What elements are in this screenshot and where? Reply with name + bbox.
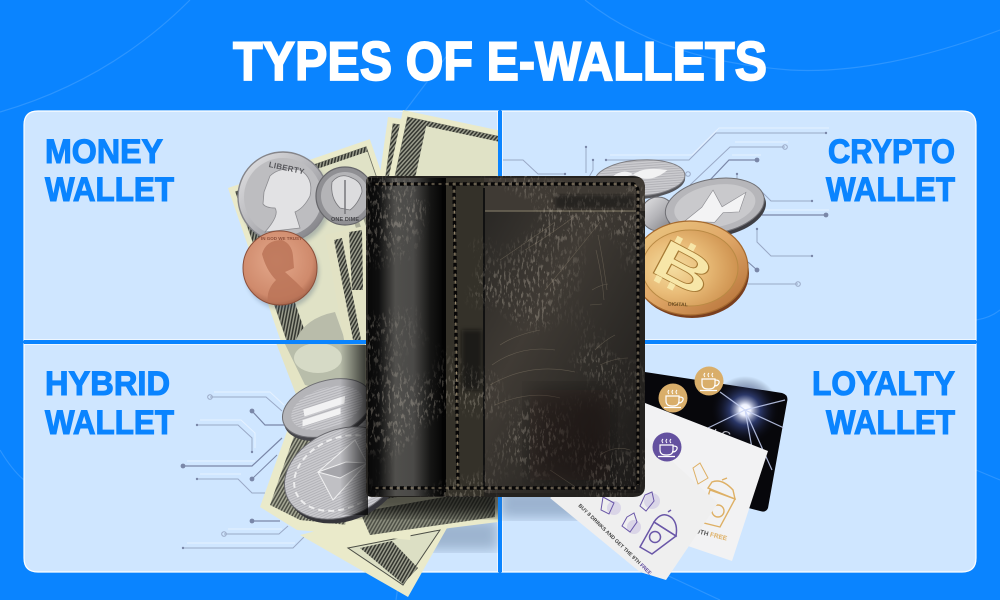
card: purple front white card <box>550 432 718 580</box>
illustration: dollar bills lower <box>260 340 505 597</box>
heading: loyalty wallet <box>812 365 955 442</box>
bill: left fan <box>228 139 380 340</box>
penny portrait <box>262 240 306 302</box>
quarter lettering: LIBERTY <box>268 160 306 176</box>
panel: crypto wallet background <box>502 111 976 340</box>
panel: loyalty wallet background <box>502 344 976 572</box>
panel: money wallet background <box>24 111 498 340</box>
panel: hybrid wallet background <box>24 344 498 572</box>
bill: top right rear <box>380 117 401 176</box>
wallet strip shadow <box>462 330 482 390</box>
coins: hybrid silver <box>270 345 417 541</box>
badge: gold coffee left <box>658 384 688 412</box>
dime lettering: ONE DIME <box>331 217 359 223</box>
bill: upper stub <box>276 344 366 394</box>
circuit lines: hybrid <box>181 392 305 549</box>
heading: crypto wallet: CRYPTO <box>828 133 955 171</box>
panel shadow under bills <box>433 522 498 553</box>
bitcoin symbol: B <box>643 227 724 309</box>
wallet shadow on bills <box>355 497 498 520</box>
quarter portrait <box>263 169 311 232</box>
small gold cup <box>693 463 708 484</box>
bill: centre strip <box>343 226 366 340</box>
heading: loyalty wallet: WALLET <box>826 404 955 442</box>
coin: ripple <box>594 157 686 202</box>
reward text: BUY 8 DRINKS AND GET THE 9TH FREE <box>577 503 653 577</box>
wallet centre strip <box>445 178 484 496</box>
card: black star card <box>640 372 787 512</box>
coin: bitcoin <box>632 221 749 318</box>
heading: hybrid wallet: HYBRID <box>45 365 170 403</box>
coin: rear middle <box>333 393 383 443</box>
leather wallet <box>366 176 646 497</box>
badge: gold coffee right <box>694 366 724 396</box>
coin: monero <box>661 171 770 245</box>
coin: ethereum <box>270 409 417 541</box>
bitcoin lettering: DIGITAL <box>668 302 688 308</box>
loyalty cards <box>500 366 787 580</box>
heading: loyalty wallet: LOYALTY <box>812 365 955 403</box>
coin: dime <box>316 167 374 225</box>
bill: top right front <box>389 110 498 176</box>
large purple cup <box>640 510 676 554</box>
wallet leather scratches <box>366 176 646 497</box>
title: TYPES OF E-WALLETS <box>233 30 767 92</box>
bill: right fan <box>345 497 498 531</box>
card: gold rear white card <box>600 403 768 561</box>
ethereum diamond <box>318 440 367 500</box>
heading: money wallet: WALLET <box>45 171 174 209</box>
wallet pocket <box>485 211 640 493</box>
illustration: dollar bills upper <box>228 110 498 340</box>
bill: left lower portrait <box>296 312 345 340</box>
coin: quarter <box>238 152 331 246</box>
coin: small rear <box>641 197 675 231</box>
wallet stitching <box>372 184 638 488</box>
dime torch and branches <box>332 176 362 210</box>
heading: hybrid wallet <box>45 365 174 442</box>
dividers <box>24 111 976 572</box>
wallet top band <box>484 178 645 211</box>
heading: crypto wallet: WALLET <box>826 171 955 209</box>
circuit lines: crypto <box>503 128 829 286</box>
wallet shadow <box>500 488 650 518</box>
stamp cups <box>607 493 660 534</box>
penny lettering: IN GOD WE TRUST <box>261 236 302 241</box>
badge: purple coffee <box>652 432 682 462</box>
wallet left roll <box>368 178 444 496</box>
heading: money wallet: MONEY <box>45 133 163 171</box>
heading: money wallet <box>45 133 174 209</box>
wallet body <box>366 176 646 497</box>
coins: crypto silver and bitcoin <box>594 157 770 318</box>
heading: hybrid wallet: WALLET <box>45 404 174 442</box>
bill: left fan <box>260 431 411 540</box>
heading: crypto wallet <box>826 133 955 209</box>
card lettering: LC <box>711 425 732 445</box>
bill: bottom tip <box>300 528 447 597</box>
coin: dash <box>275 368 380 452</box>
gold shake cup <box>700 478 735 527</box>
wallet shadow on coins <box>340 345 368 515</box>
coin: penny <box>243 231 319 309</box>
gold reward text: 9TH FREE <box>696 528 728 543</box>
